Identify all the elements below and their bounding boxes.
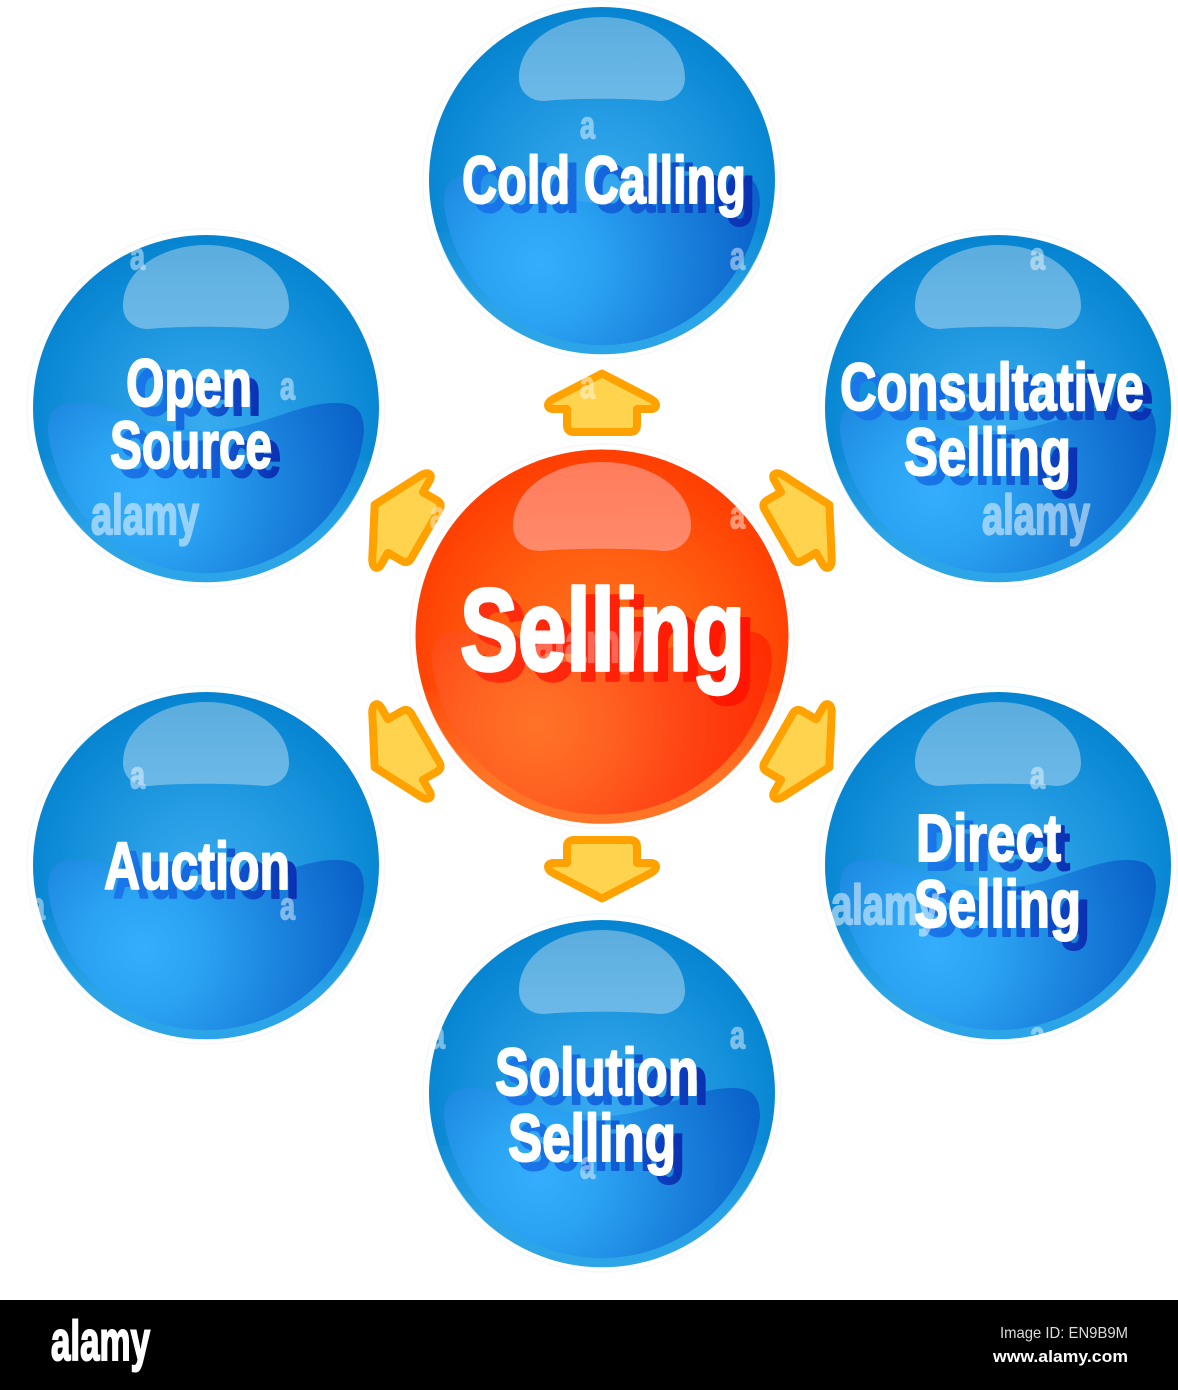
label: Direct Selling: Selling — [914, 867, 1081, 942]
watermarks: a — [130, 755, 146, 797]
label: Direct Selling: Selling — [923, 876, 1090, 951]
text: alamy — [91, 483, 199, 546]
label: Auction: Auction — [104, 829, 290, 904]
label: Consultative Selling: Selling — [913, 424, 1080, 499]
circle: Consultative Selling — [819, 229, 1177, 587]
label: Open Source: Open — [126, 346, 252, 421]
watermarks: a — [580, 105, 596, 147]
watermarks: a — [130, 236, 146, 278]
label: Direct Selling: Direct — [916, 801, 1061, 876]
watermarks: a — [730, 1015, 746, 1057]
text: alamy — [831, 873, 939, 936]
website: www.alamy.com — [992, 1347, 1128, 1366]
watermarks: a — [730, 236, 746, 278]
watermarks: a — [280, 886, 296, 928]
text: alamy — [533, 611, 641, 674]
circle: Auction — [27, 686, 385, 1044]
center circle: Selling — [410, 444, 794, 828]
arrow: lower left — [348, 691, 452, 814]
watermarks: a — [580, 365, 596, 407]
watermarks: a — [1030, 236, 1046, 278]
label: Cold Calling: Cold Calling — [471, 152, 755, 227]
watermarks: a — [1030, 1015, 1046, 1057]
watermarks: a — [430, 1015, 446, 1057]
label: Open Source: Source — [110, 408, 272, 483]
label: Selling: Selling — [470, 575, 755, 705]
watermarks — [30, 105, 1046, 1187]
circle: Cold Calling — [423, 1, 781, 359]
watermarks: a — [430, 495, 446, 537]
watermarks: a — [580, 1145, 596, 1187]
label: Consultative Selling — [840, 350, 1153, 499]
circle: Open Source — [27, 229, 385, 587]
image id: Image ID: EN9B9M — [1000, 1325, 1128, 1342]
label: Open Source — [110, 346, 281, 492]
label: Solution Selling: Solution — [504, 1044, 708, 1119]
footer logo: alamy — [51, 1309, 150, 1372]
circle: Solution Selling — [423, 914, 781, 1272]
arrow: upper right — [752, 458, 856, 581]
label: Auction: Auction — [113, 838, 299, 913]
label: Solution Selling: Selling — [508, 1101, 676, 1176]
label: Cold Calling — [462, 143, 755, 227]
label: Solution Selling: Solution — [495, 1035, 699, 1110]
label: Solution Selling: Selling — [517, 1110, 685, 1185]
label: Cold Calling: Cold Calling — [462, 143, 746, 218]
watermarks: a — [30, 886, 46, 928]
watermarks: a — [1030, 755, 1046, 797]
label: Solution Selling — [495, 1035, 708, 1185]
footer bar — [0, 1300, 1178, 1390]
arrow: up — [548, 374, 656, 432]
arrow: upper left — [348, 458, 452, 581]
arrow: lower right — [752, 691, 856, 814]
arrow: down — [548, 840, 656, 898]
label: Direct Selling: Direct — [925, 810, 1070, 885]
label: Direct Selling — [914, 801, 1090, 951]
watermarks: a — [730, 495, 746, 537]
label: Selling: Selling — [460, 565, 745, 695]
label: Open Source: Open — [135, 355, 261, 430]
watermarks: a — [280, 366, 296, 408]
label: Consultative Selling: Selling — [904, 415, 1071, 490]
text: alamy — [982, 483, 1090, 546]
circle: Direct Selling — [819, 686, 1177, 1044]
label: Open Source: Source — [119, 417, 281, 492]
